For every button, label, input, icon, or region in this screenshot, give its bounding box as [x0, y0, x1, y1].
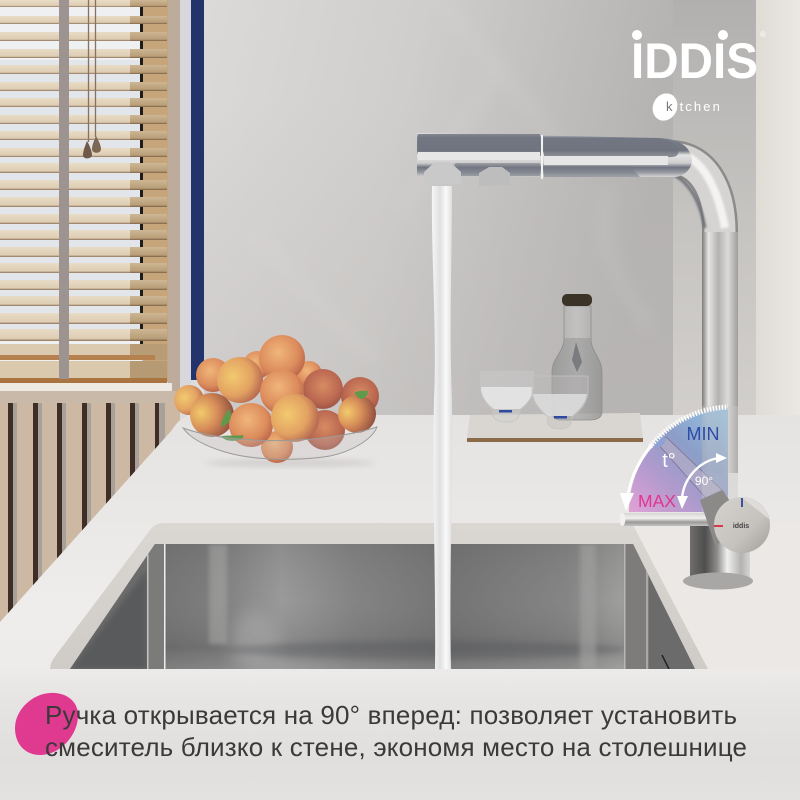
faucet horizontal spout: [417, 133, 692, 177]
blue wall accent strip: [191, 0, 204, 380]
back peaches: [174, 335, 379, 415]
hot mark: [714, 525, 723, 527]
water stream: [432, 186, 452, 669]
aerator left: [424, 162, 461, 184]
carafe stopper: [562, 294, 592, 306]
sector fill: [629, 408, 728, 512]
caption text: смеситель близко к стене, экономя место на столешнице: [45, 732, 747, 762]
blind cords and tassels: [83, 0, 101, 158]
faucet vertical riser: [702, 228, 738, 473]
steel bowl: [60, 544, 710, 670]
kitchen word: kitchen: [666, 99, 722, 114]
front peaches: [190, 393, 376, 463]
peach leaves: [222, 392, 367, 440]
mixer base ring: [683, 572, 753, 590]
mixer lever and dial: [620, 490, 770, 553]
dial disc: [714, 497, 770, 553]
logo IDDIS kitchen: [631, 30, 766, 125]
kitchen blob: [648, 89, 682, 125]
sink stone rim: [50, 523, 708, 669]
wordmark: IDDIS: [631, 33, 758, 89]
temperature arrow: [620, 445, 652, 511]
marble tray: [467, 413, 643, 442]
ghost raised lever: [657, 437, 726, 505]
horizontal lever: [620, 513, 714, 526]
faucet bend: [650, 153, 725, 232]
temperature sector overlay: [620, 406, 738, 516]
rotation arrow 90 degrees: [677, 453, 727, 509]
pink accent blob: [15, 693, 78, 755]
wordmark i dots: [632, 30, 728, 40]
dial brand: iddis: [733, 523, 749, 530]
wooden slat panel under window: [0, 383, 180, 628]
second outlet: [479, 167, 510, 186]
counter front and caption band: [0, 669, 800, 800]
label: 90 degrees: 90°: [695, 474, 713, 488]
carafe: [552, 294, 602, 420]
blind slats: [0, 0, 167, 383]
wall: marble background: [204, 0, 800, 440]
label: MAX: MAX: [638, 491, 676, 511]
dial facet: [741, 497, 769, 519]
caption with pink accent: [15, 693, 747, 762]
label: temperature: t°: [662, 450, 676, 472]
peach bowl: [174, 335, 379, 467]
water glasses: [480, 371, 588, 429]
window with wooden blinds: [0, 0, 204, 400]
caption text: Ручка открывается на 90° вперед: позволяет установить: [45, 700, 737, 730]
faucet: [417, 133, 738, 473]
kitchen countertop: [0, 415, 800, 800]
lever neck: [700, 490, 738, 548]
cold mark: [741, 498, 743, 507]
riser in front of sector: [702, 406, 738, 516]
window frame: [168, 0, 180, 392]
glass plate: [183, 427, 377, 459]
left glass: [480, 371, 534, 422]
label: MIN: MIN: [686, 424, 720, 444]
light trim: [180, 0, 191, 400]
bowl shadow: [205, 459, 375, 467]
blind ladder tape: [59, 0, 69, 379]
mixer base column: [690, 520, 750, 582]
dotted temperature arc: [650, 407, 728, 447]
registered mark: ®: [760, 30, 766, 39]
mixer base: [683, 520, 753, 590]
countertop right return: [632, 523, 800, 669]
sink: [50, 523, 710, 670]
right glass: [532, 376, 588, 429]
